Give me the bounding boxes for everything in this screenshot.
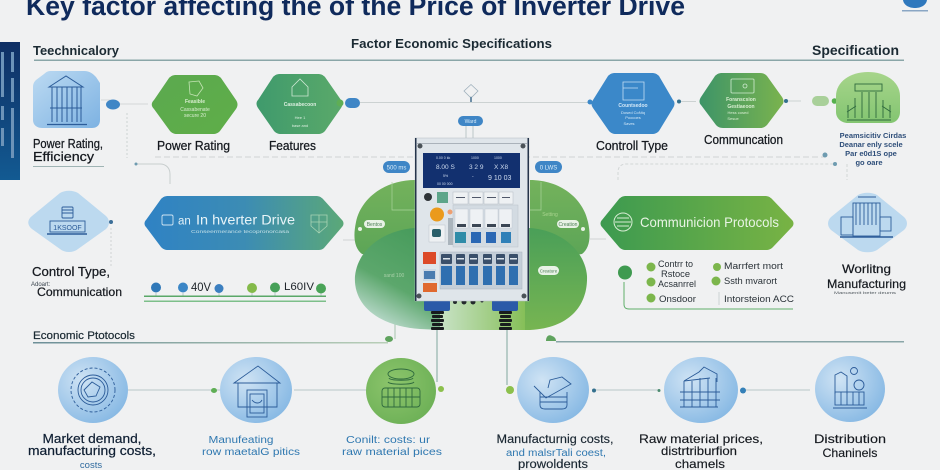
upper right lobe (530, 180, 590, 262)
label: features: Features (269, 139, 316, 153)
list: protocols: Contrr to (658, 259, 693, 269)
panel: technical hexagon row (33, 71, 120, 167)
header: factor economic specifications: Factor Economic Specifications (351, 36, 552, 51)
lower left lobe (355, 228, 470, 330)
right tag (557, 220, 579, 228)
voltage scale: 40V (191, 280, 211, 294)
label: control type communication: Communication (37, 285, 122, 299)
step: market demand (58, 357, 128, 423)
display: 1000 (471, 156, 479, 160)
icon: specification green house (836, 72, 900, 123)
panel: central green cloud: Setting (542, 212, 558, 218)
connector dot (211, 388, 217, 393)
label: working manufacturing: Manufacturing (827, 277, 906, 291)
connector nodes (336, 98, 360, 108)
lower tag: Creature (540, 268, 558, 274)
panel: central green cloud (354, 180, 590, 330)
left tag (364, 220, 385, 228)
banner: an inverter drive: an (178, 216, 191, 228)
enclosure (415, 138, 529, 301)
text: specification detail: Peamsicitiv Cirdas (840, 131, 906, 140)
panel: control type hexagon: Countsedoo (618, 103, 648, 109)
connector: bottom nodes (385, 335, 556, 342)
display: X X8 (494, 164, 508, 171)
display: 00 00 000 (437, 182, 453, 186)
side tab (0, 42, 20, 180)
header rule (34, 60, 904, 61)
label: communication: Communcation (704, 133, 783, 147)
pills: side tags: 500 ms (387, 166, 406, 172)
label: distribution: Chaninels (822, 446, 878, 460)
header: technical: Teechnicalory (33, 43, 120, 58)
list: protocols: Acsanrrel (658, 279, 696, 289)
lower right lobe (470, 228, 587, 330)
pill: top (458, 116, 483, 126)
text: specification detail: Deanar enly scele (839, 140, 903, 149)
port box (429, 218, 453, 245)
label: control type communication: Adoart: (31, 282, 51, 288)
connector: right nodes (677, 96, 837, 106)
panel: communication hexagon: Hess cosed (728, 110, 748, 115)
header: economic protocols: Economic Ptotocols (33, 330, 136, 342)
label: manufacturing: row maetalG pitics (202, 447, 300, 458)
step: control costs (366, 358, 444, 424)
display: 9 10 03 (488, 175, 511, 182)
panel: control type hexagon: Dosed CoNtq (621, 110, 645, 115)
panel: features hexagon: Cassabecoon (284, 102, 316, 108)
lower tag (538, 266, 559, 275)
logo (902, 0, 928, 12)
panel: communication hexagon (700, 73, 784, 128)
display (423, 153, 520, 188)
voltage scale: L60IV (284, 281, 315, 293)
label: power rating efficiency: Power Rating, (33, 137, 103, 151)
label: power rating: Power Rating (157, 139, 230, 153)
list: protocols: Marrfert mort (724, 261, 784, 271)
text: specification detail: go oare (855, 158, 883, 167)
lower center (440, 300, 525, 330)
function keys (424, 192, 513, 204)
label: control type communication (31, 265, 122, 299)
connectors (424, 300, 518, 330)
banner: communication protocols (600, 196, 794, 250)
blob lines (392, 182, 541, 210)
label: control type communication: Control Type, (32, 265, 110, 279)
label: control costs: Conilt: costs: ur (346, 434, 431, 446)
economic rules (33, 341, 904, 344)
pill: top: Ward (465, 119, 477, 125)
list: protocols: Intorsteion ACC (724, 294, 795, 304)
list: protocols: Rstoce (661, 269, 690, 279)
panel: power rating hexagon: Cassabenate (180, 107, 210, 113)
display: 8.00 S (436, 164, 455, 171)
label: market demand: Market demand, (42, 432, 142, 446)
label: control type: Controll Type (596, 139, 668, 153)
efficiency rule (33, 166, 104, 167)
label: raw material: distrtriburfion (661, 444, 737, 458)
left tag: Bentos (367, 222, 383, 228)
panel: control type hexagon: Poocoes (625, 115, 641, 120)
icon: working manufacturing diamond (828, 193, 907, 252)
list: protocols: Onsdoor (659, 294, 696, 304)
header: specification: Specification (812, 42, 899, 58)
icon: small diamond (464, 84, 478, 102)
pills: side tags (383, 161, 562, 173)
panel: power rating hexagon: secure 20 (184, 113, 206, 119)
pills: side tags: 0 LWS (540, 166, 557, 172)
label: working manufacturing: Manusenit beter deums (834, 290, 896, 295)
panel: features hexagon: base and (292, 123, 308, 128)
label: manufacturing: Manufeating (208, 435, 274, 446)
text: specification detail: Par e0d1S ope (845, 149, 897, 158)
voltage scale (144, 280, 326, 302)
label: control costs: raw material pices (342, 446, 442, 458)
panel: control type hexagon (588, 73, 674, 134)
connector lines (101, 100, 847, 390)
panel: central green cloud: sand 100 (384, 273, 405, 279)
banner: communication protocols: Communicion Protocols (640, 214, 779, 230)
step: raw material (658, 357, 746, 423)
orange dial (430, 208, 444, 222)
display: 0.00 0 kk (436, 156, 450, 160)
display: - (472, 174, 474, 180)
panel: features hexagon (256, 74, 342, 134)
step: manufacturing costs (506, 357, 596, 423)
icon: control type diamond (28, 191, 113, 252)
right tag: Creation (559, 222, 578, 228)
label: market demand: manufacturing costs, (28, 444, 156, 458)
key panel (453, 205, 518, 247)
label: manufacturing costs: and malsrTali coest, (506, 448, 606, 459)
panel: communication hexagon: Foranscsion (726, 97, 756, 103)
module bank (440, 252, 522, 289)
label: raw material: Raw material prices, (639, 432, 763, 446)
panel: communication hexagon: Sesue (727, 116, 739, 121)
display: 3 2 9 (469, 164, 484, 171)
banner: an inverter drive: In hverter Drive (196, 212, 295, 228)
step: distribution (815, 356, 885, 422)
panel: power rating hexagon (152, 75, 238, 134)
banner: an inverter drive: Conseermerance tecopronorcasa (191, 229, 289, 235)
label: power rating efficiency: Efficiency (33, 150, 95, 164)
panel: control type hexagon: Saves (623, 121, 635, 126)
label: manufacturing costs: Manufacturnig costs, (496, 434, 614, 446)
icon: control type diamond: 1KSOOF (53, 225, 82, 232)
display: 5% (443, 174, 448, 178)
panel: features hexagon: Hee 1 (295, 115, 306, 120)
label: working manufacturing: Worlitng (842, 262, 891, 276)
display: 1000 (494, 156, 502, 160)
list: protocols (618, 259, 795, 309)
banner: an inverter drive (144, 196, 344, 250)
label: distribution: Distribution (814, 432, 886, 446)
icon: power rating building (33, 71, 100, 128)
label: working manufacturing (827, 262, 906, 295)
step: manufacturing (220, 357, 292, 423)
list: protocols: Ssth mvarort (724, 276, 778, 286)
connector pill (106, 100, 120, 110)
panel: communication hexagon: Gestiaeoon (727, 104, 755, 110)
red keys (423, 252, 437, 292)
inverter device (415, 138, 529, 330)
panel: power rating hexagon: Feasible (185, 99, 205, 105)
upper left lobe (354, 180, 415, 262)
